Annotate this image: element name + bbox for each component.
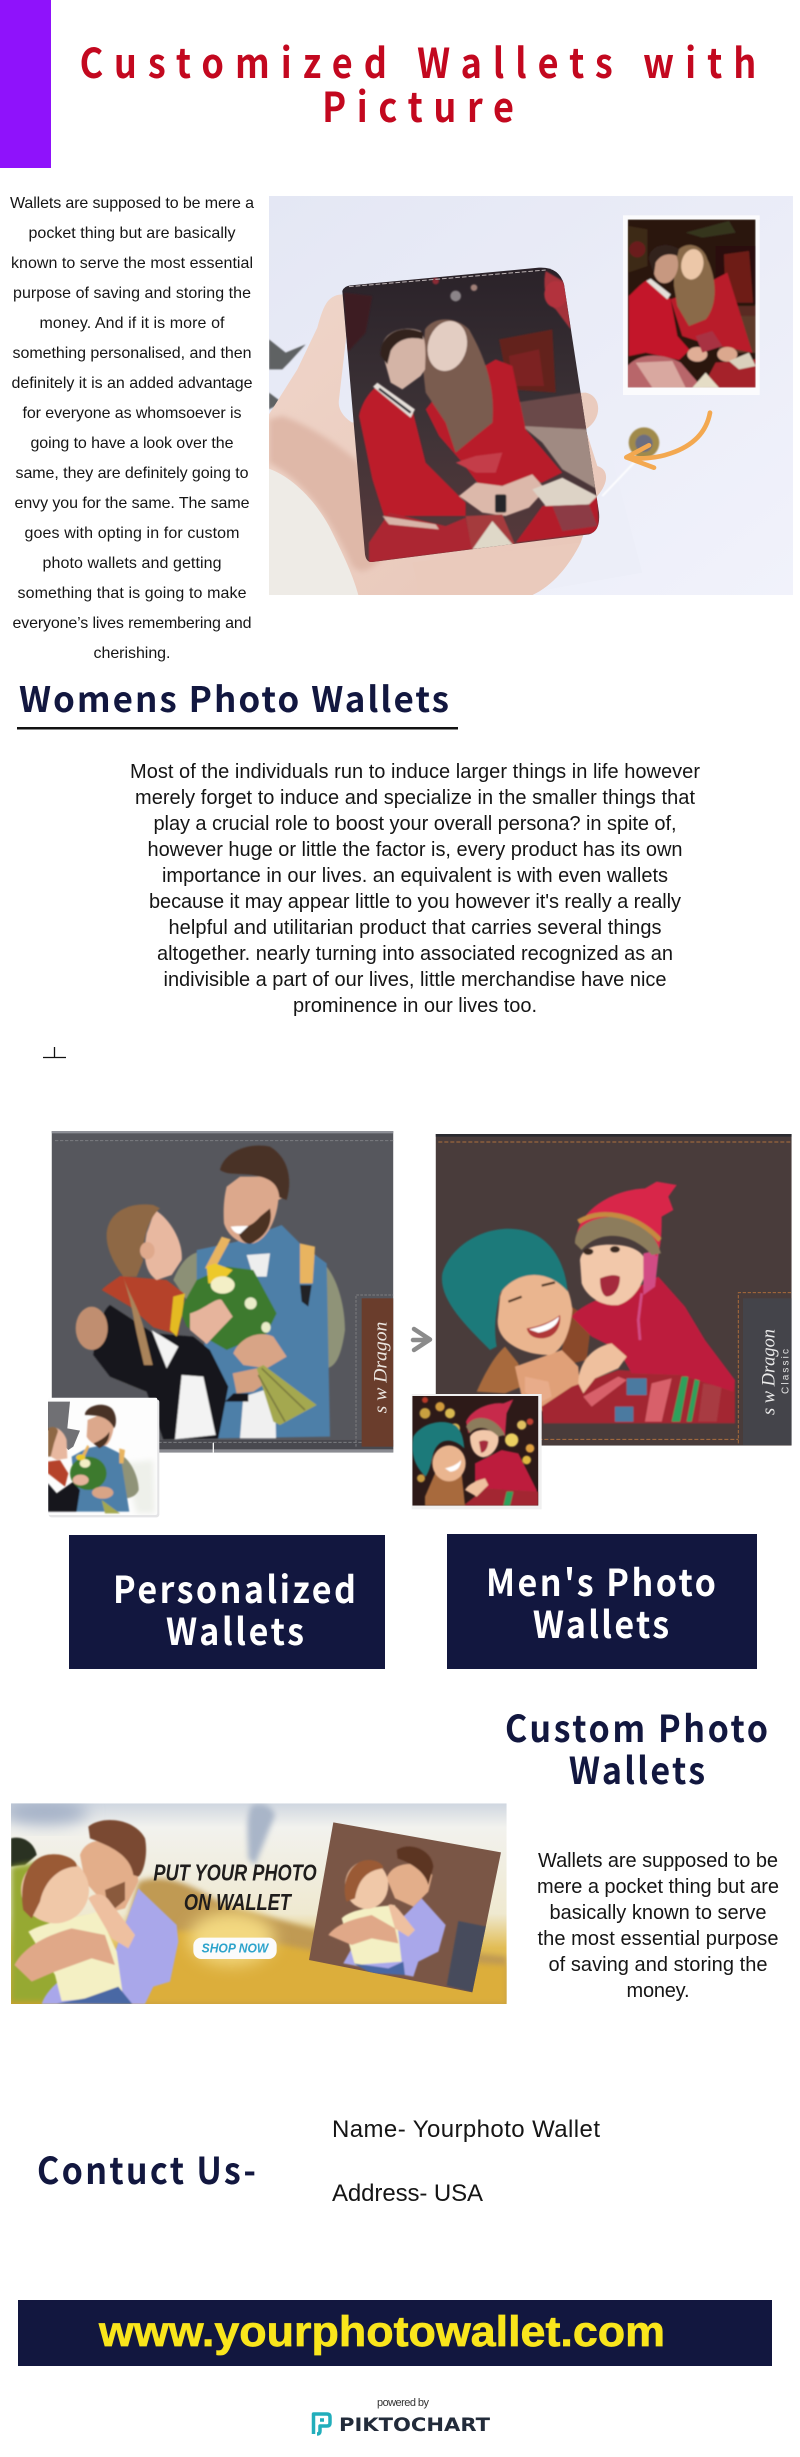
label box: Personalized Wallets: Wallets (166, 1603, 304, 1656)
footer: powered by piktochart (314, 2397, 490, 2436)
title (80, 31, 756, 135)
intro text block: cherishing. (94, 645, 170, 662)
paragraph: Womens Photo Wallets: however huge or little the factor is, every product has its own (148, 839, 682, 861)
brown wallet label: s w Dragon (371, 1322, 392, 1413)
intro text block: for everyone as whomsoever is (22, 405, 242, 422)
banner headline: PUT YOUR PHOTO (153, 1860, 317, 1886)
intro text block: same, they are definitely going to (16, 465, 249, 482)
photo: hand holding custom wallet (269, 196, 793, 595)
brown wallet label (356, 1295, 393, 1447)
label box: Personalized Wallets: Personalized (113, 1561, 356, 1614)
icon: brooch on table (602, 427, 659, 496)
intro text block: photo wallets and getting (42, 555, 222, 572)
grey wallet label: Classic (780, 1349, 791, 1394)
banner headline: ON WALLET (184, 1889, 293, 1915)
banner headline (154, 1864, 316, 1910)
paragraph: Womens Photo Wallets: merely forget to induce and specialize in the smaller things that (135, 787, 695, 809)
contact details (332, 2116, 600, 2207)
heading: Womens Photo Wallets: Womens Photo Wallets (19, 672, 449, 723)
shop now button: SHOP NOW (202, 1941, 270, 1956)
paragraph: Womens Photo Wallets: importance in our lives. an equivalent is with even wallets (162, 865, 668, 887)
icon: piktochart logo (314, 2414, 330, 2434)
intro text block: purpose of saving and storing the (13, 285, 251, 302)
intro text block: known to serve the most essential (11, 255, 253, 272)
label box: Personalized Wallets (69, 1535, 385, 1669)
shop now button (193, 1938, 277, 1959)
paragraph: Womens Photo Wallets: altogether. nearly turning into associated recognized as an (157, 943, 673, 965)
intro text block: money. And if it is more of (40, 315, 225, 332)
paragraph: custom photo wallets: basically known to serve (550, 1902, 766, 1924)
arrow: orange curved pointer (626, 413, 710, 468)
paragraph: Womens Photo Wallets: prominence in our lives too. (293, 995, 537, 1017)
paragraph: Womens Photo Wallets (130, 761, 700, 1017)
footer: powered by piktochart: powered by (377, 2397, 430, 2409)
intro text block: definitely it is an added advantage (12, 375, 253, 392)
photo: personalized couple wallet (48, 1130, 393, 1517)
intro text block: envy you for the same. The same (14, 495, 250, 512)
label box: Men's Photo Wallets (447, 1534, 757, 1669)
intro text block: something that is going to make (18, 585, 247, 602)
photo: mother and child wallet (412, 1133, 792, 1509)
title: Customized Wallets with (80, 31, 756, 91)
paragraph: Womens Photo Wallets: helpful and utilitarian product that carries several things (168, 917, 662, 939)
arrow: grey chevron (413, 1329, 430, 1350)
hand (269, 294, 606, 595)
heading: Custom Photo Wallets: Custom Photo (505, 1700, 768, 1753)
heading: contact: Contuct Us- (37, 2142, 256, 2195)
inset: couple reference photo (48, 1398, 159, 1517)
wallet with couple print (342, 268, 599, 563)
intro text block: everyone’s lives remembering and (12, 615, 252, 632)
intro text block: goes with opting in for custom (24, 525, 240, 542)
grey wallet label: s w Dragon (758, 1329, 779, 1415)
footer: powered by piktochart: PIKTOCHART (339, 2414, 490, 2436)
paragraph: custom photo wallets: the most essential purpose (538, 1928, 778, 1950)
paragraph: custom photo wallets (537, 1850, 779, 2002)
decorative purple bar (0, 0, 51, 168)
paragraph: Womens Photo Wallets: indivisible a part of our lives, little merchandise have nice (164, 969, 666, 991)
paragraph: custom photo wallets: of saving and storing the (548, 1954, 768, 1976)
paragraph: Womens Photo Wallets: play a crucial role to boost your overall persona? in spite of, (154, 813, 676, 835)
paragraph: custom photo wallets: mere a pocket thing but are (537, 1876, 779, 1898)
inset photo of couple (623, 215, 760, 395)
paragraph: custom photo wallets: Wallets are supposed to be (538, 1850, 778, 1872)
paragraph: custom photo wallets: money. (626, 1980, 690, 2002)
label box: Men's Photo Wallets: Men's Photo (486, 1554, 716, 1607)
banner: put your photo on wallet (2, 1798, 507, 2004)
heading: Custom Photo Wallets (505, 1700, 768, 1795)
website banner: www.yourphotowallet.com (98, 2308, 665, 2356)
contact details: Address- USA (332, 2180, 483, 2207)
intro text block: pocket thing but are basically (28, 225, 236, 242)
label box: Men's Photo Wallets: Wallets (533, 1596, 669, 1649)
intro text block: going to have a look over the (30, 435, 234, 452)
banner wallet (309, 1822, 501, 1992)
intro text block: Wallets are supposed to be mere a (10, 195, 254, 212)
paragraph: Womens Photo Wallets: Most of the individuals run to induce larger things in life however (130, 761, 700, 783)
intro text block: something personalised, and then (12, 345, 252, 362)
title: Picture (322, 75, 514, 135)
contact details: Name- Yourphoto Wallet (332, 2116, 600, 2143)
small stray mark (43, 1047, 66, 1058)
heading: Custom Photo Wallets: Wallets (569, 1742, 705, 1795)
sweater cuff (269, 469, 358, 595)
inset: mother and child reference photo (412, 1394, 542, 1509)
grey wallet label (738, 1293, 792, 1445)
intro text block (10, 195, 254, 662)
paragraph: Womens Photo Wallets: because it may appear little to you however it's really a really (149, 891, 681, 913)
website banner (18, 2300, 772, 2366)
